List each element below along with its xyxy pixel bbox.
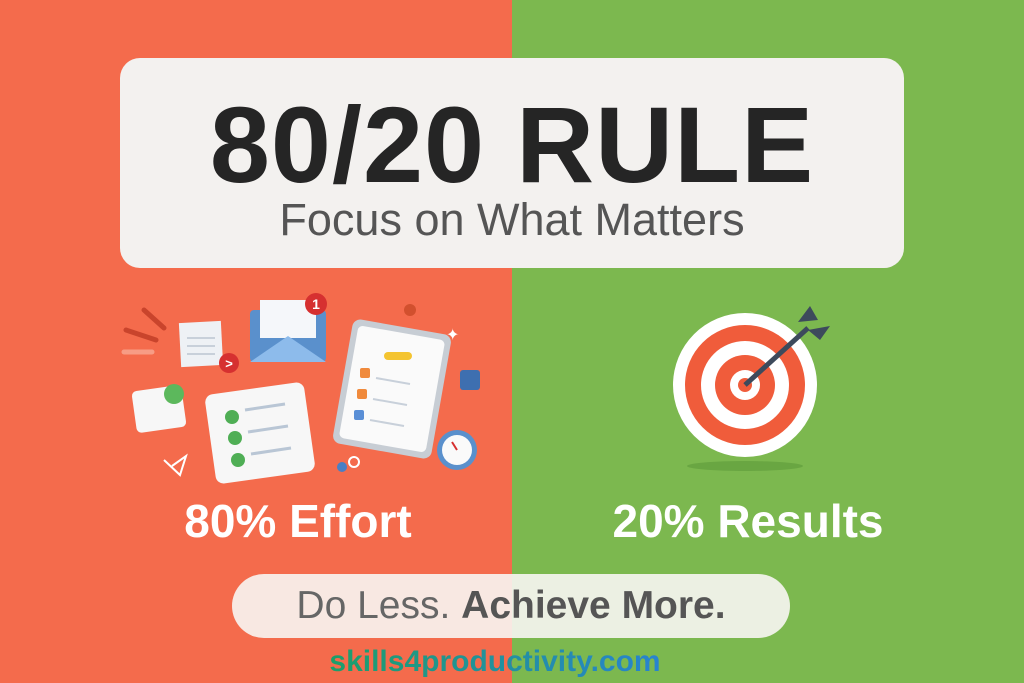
icon: stress lines — [124, 310, 164, 352]
icon: small card — [131, 384, 187, 433]
icon: pins — [337, 457, 359, 472]
tagline pill — [232, 574, 790, 638]
title panel — [120, 58, 904, 268]
icon: note: > — [225, 356, 233, 371]
icon: sparkle: ✦ — [446, 327, 459, 344]
icon: target with arrow — [673, 306, 830, 471]
icon: clipboard — [332, 318, 452, 460]
title: 80/20 RULE — [210, 84, 814, 205]
icon: envelope: 1 — [312, 296, 320, 312]
tagline pill: Do Less. Achieve More. — [296, 584, 726, 627]
icon: image badge — [460, 370, 480, 390]
icon: stopwatch — [437, 430, 477, 470]
icon: envelope — [250, 293, 327, 362]
background left orange — [0, 0, 512, 683]
illustration: effort icons — [122, 293, 480, 484]
label: 20% Results: 20% Results — [612, 495, 884, 547]
footer url: skills4productivity.com — [329, 645, 661, 678]
icon: checklist card — [204, 381, 316, 485]
icon: note — [179, 321, 239, 373]
background right green — [512, 0, 1024, 683]
subtitle: Focus on What Matters — [279, 194, 745, 245]
label: 80% Effort: 80% Effort — [184, 495, 412, 547]
